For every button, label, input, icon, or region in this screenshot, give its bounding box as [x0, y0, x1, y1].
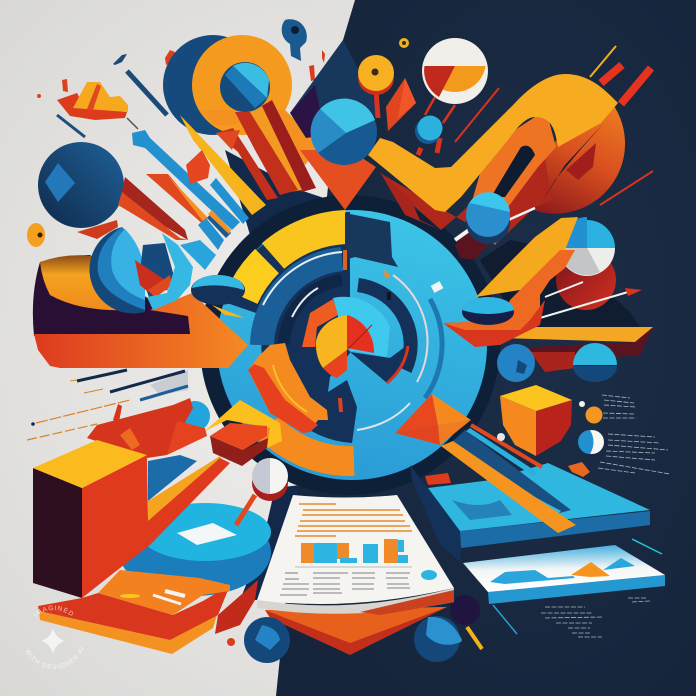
small red marks — [309, 50, 325, 81]
big left orange shape — [33, 255, 248, 368]
blue ball top — [220, 62, 270, 112]
pin icon top — [282, 19, 307, 61]
navy circle behind ring — [163, 35, 263, 135]
dark base right — [480, 240, 640, 327]
watermark seal: WITH DESIGNER AI — [26, 647, 84, 669]
left inner dark ring — [284, 280, 342, 345]
navy triangle peak — [290, 40, 380, 150]
left inner blue ring — [262, 259, 342, 345]
center red base — [323, 350, 347, 378]
small dots right — [568, 401, 604, 477]
white arc inner left — [292, 288, 318, 317]
accent lines lower right — [467, 539, 662, 649]
paper heading lines — [295, 504, 412, 536]
white arrow — [533, 282, 642, 320]
cyan crescent — [147, 233, 193, 310]
red back block — [87, 398, 207, 458]
background: dark side — [276, 0, 696, 696]
right navy inner arc — [358, 285, 411, 370]
pie circle — [422, 38, 488, 104]
blue ball main — [311, 99, 377, 165]
sliced blue ball — [89, 227, 216, 314]
seal star — [42, 628, 64, 654]
floating shapes upper left — [37, 50, 175, 137]
yellow knob — [358, 55, 394, 118]
paper text rows — [280, 567, 412, 595]
orange dot — [27, 223, 45, 247]
blue platform — [410, 463, 650, 562]
big box — [33, 440, 230, 598]
lines upper right — [455, 46, 653, 205]
paper bar chart — [301, 539, 408, 563]
central disc — [217, 210, 487, 480]
orange platform — [38, 570, 258, 654]
speed lines lower left — [27, 370, 188, 440]
blue ball under zigzag — [455, 192, 535, 260]
orange arrow base — [443, 300, 545, 347]
white pin — [236, 458, 288, 525]
orange-red wedge under ball — [300, 150, 376, 210]
zigzag slot — [491, 146, 535, 197]
tiny text lines below platform — [541, 598, 650, 637]
lower right blue ball — [414, 595, 480, 662]
dark crack on dome — [540, 122, 605, 205]
yellow flame right — [476, 217, 578, 297]
red dot — [227, 638, 235, 646]
blue half ball — [180, 401, 210, 431]
sunburst rays — [77, 100, 316, 250]
watermark seal — [26, 606, 84, 669]
red kite — [386, 78, 416, 131]
watermark seal: IMAGINED — [33, 606, 74, 617]
pyramid stripes — [441, 425, 576, 533]
orange flame right — [500, 250, 575, 335]
lower left blue sphere — [244, 617, 290, 663]
yellow segments — [242, 227, 346, 297]
gold ring — [399, 38, 409, 48]
orange gear segment — [248, 343, 328, 432]
center cyan wedge — [333, 297, 390, 357]
paper document — [257, 495, 454, 615]
disc navy ring left — [224, 212, 350, 345]
orange tab — [343, 250, 347, 270]
pie ball right — [559, 217, 615, 276]
center yellow egg — [316, 315, 347, 368]
red gear strip — [248, 364, 318, 433]
zigzag orange dome — [505, 90, 625, 214]
navy top sector — [345, 213, 398, 267]
center red sector — [347, 315, 374, 353]
left inner navy half — [261, 250, 357, 443]
red edge — [387, 346, 408, 383]
middle navy blob — [140, 243, 175, 300]
right flat yellow bar — [501, 327, 653, 358]
pyramid gem — [395, 394, 471, 445]
right inner ring — [425, 299, 442, 398]
white lower arc — [357, 403, 410, 430]
blue disc lower left — [119, 503, 271, 596]
navy band left of paper — [240, 485, 300, 600]
yellow-red gem left — [205, 400, 282, 466]
blue pill right — [462, 297, 514, 325]
navy sphere left — [38, 142, 124, 228]
center orange left wedge — [302, 299, 338, 347]
blue pill left — [191, 275, 245, 318]
small blue ball and sticks — [415, 97, 455, 155]
cube right — [500, 385, 572, 456]
zigzag red underlayer — [380, 130, 552, 245]
right blue icon ball and half ball — [497, 343, 617, 382]
zigzag inner orange — [470, 117, 556, 245]
orange lower ring — [268, 427, 354, 461]
orange diamond under paper — [265, 607, 447, 655]
zigzag yellow band — [368, 74, 618, 212]
red ball right — [556, 250, 616, 310]
white arc outer left — [263, 252, 342, 305]
tiny text lines right upper — [598, 395, 670, 474]
cyan chip — [180, 240, 216, 270]
rays dark base — [225, 150, 345, 235]
white arc right — [393, 275, 428, 382]
white square — [431, 281, 443, 293]
white chart platform — [463, 545, 665, 604]
small markers — [384, 270, 391, 279]
orange ring head — [192, 35, 320, 165]
box interior stripes — [148, 455, 223, 521]
central disc dark ring — [200, 195, 500, 495]
